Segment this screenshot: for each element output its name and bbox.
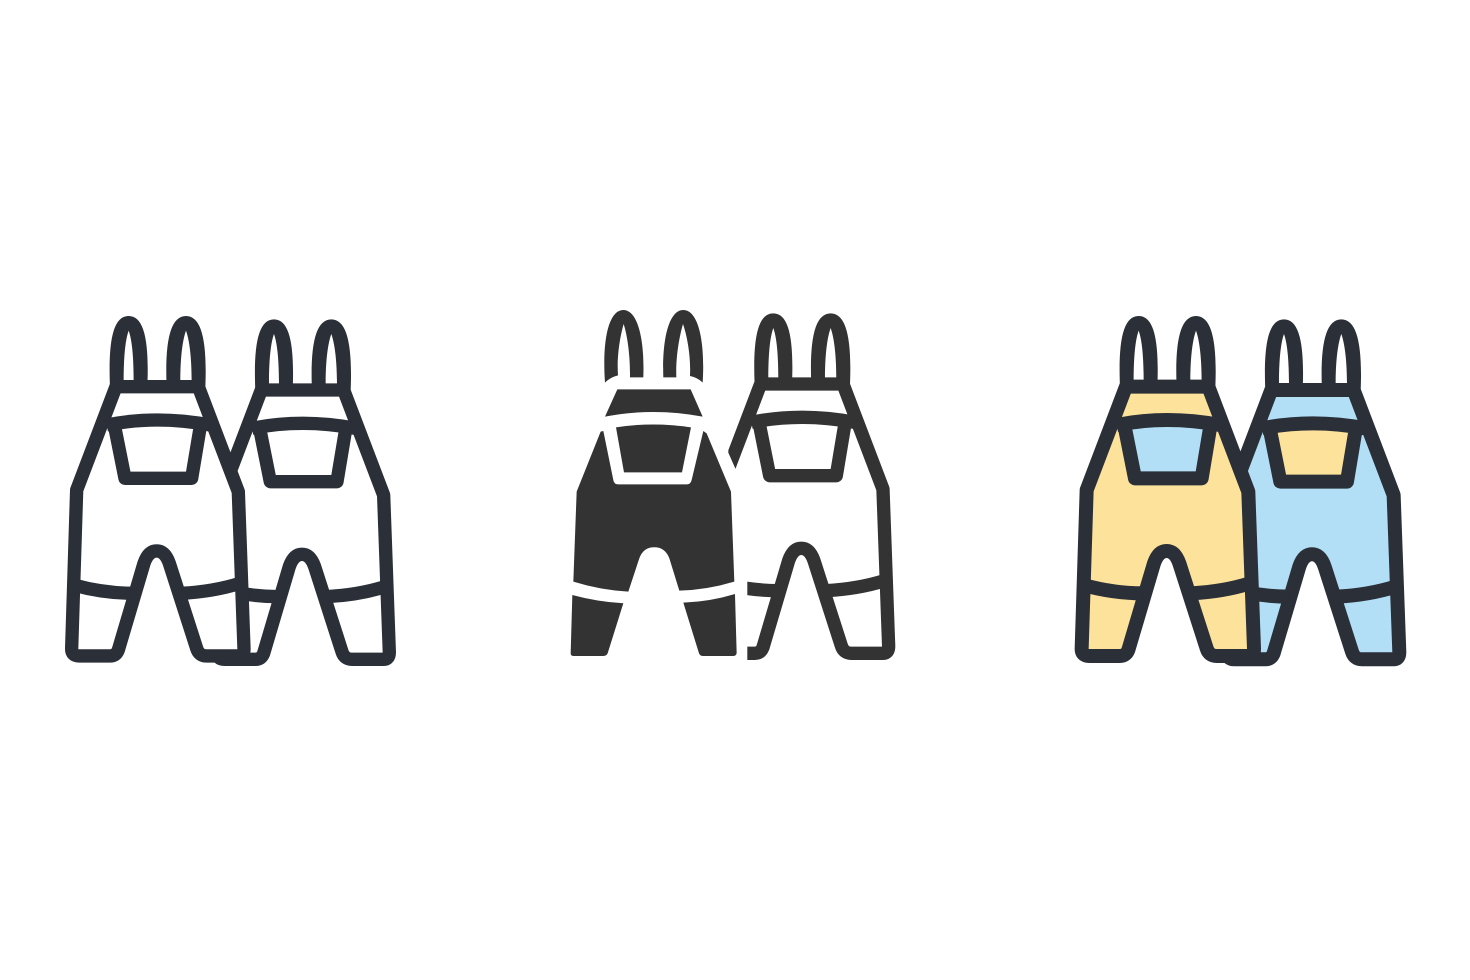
icon: solid and outline overalls pair: [571, 310, 889, 656]
icon set: overalls in three styles: [65, 310, 1406, 666]
icon: outline overalls pair: [72, 316, 389, 659]
cut outline overalls: [716, 313, 889, 653]
back overalls outline: [217, 319, 389, 659]
blue overalls: [1227, 319, 1399, 659]
solid overalls: [571, 310, 737, 656]
front overalls outline: [72, 316, 244, 656]
icon: coloured overalls pair: [1082, 316, 1399, 659]
yellow overalls: [1082, 316, 1254, 656]
